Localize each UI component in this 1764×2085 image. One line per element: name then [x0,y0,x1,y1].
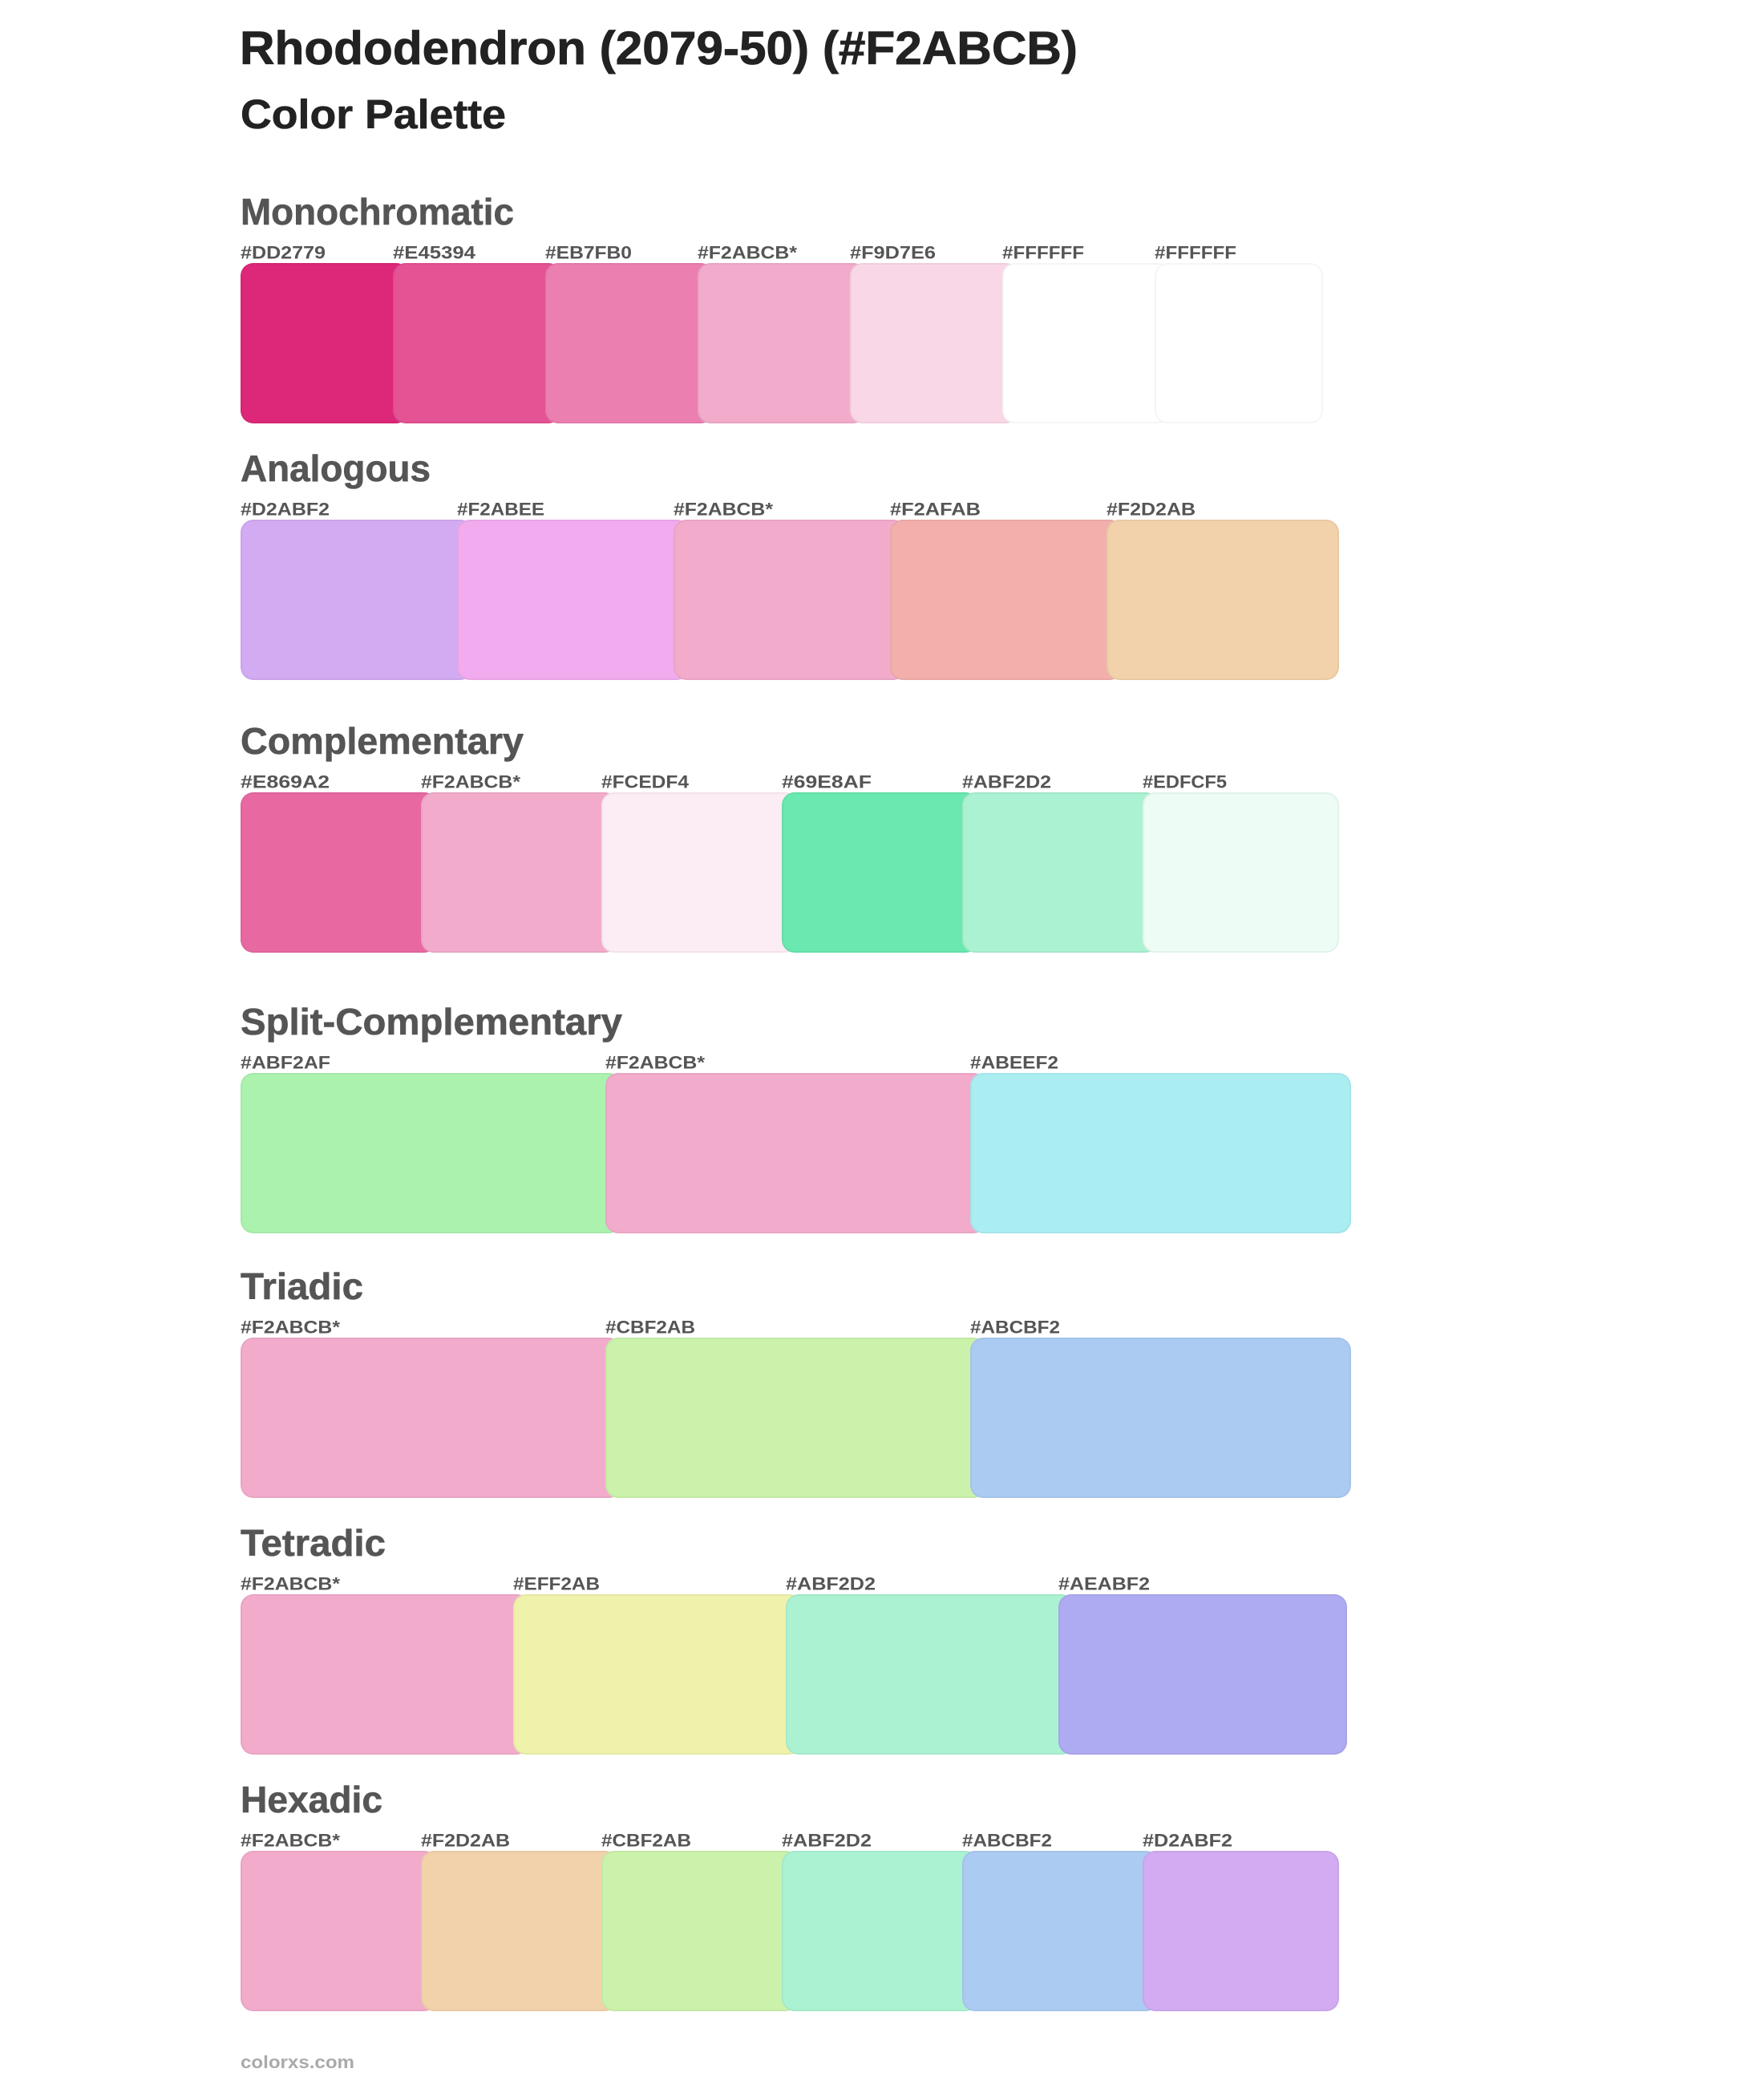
swatch: ABCBF2: #ABCBF2 [962,1830,1052,1851]
heading: Analogous: Analogous [241,447,431,489]
swatch: E869A2: #E869A2 [241,771,330,792]
subtitle: Color Palette [241,91,506,137]
swatch: FFFFFF: #FFFFFF [1155,242,1236,263]
swatch: F2ABCB [605,1052,986,1233]
swatch: F2ABCB: #F2ABCB* [674,499,773,520]
swatch: CBF2AB: #CBF2AB [605,1317,695,1338]
panel: Analogous [241,447,1339,680]
swatch: F2ABCB [674,499,906,680]
panel: Split-Complementary [241,1001,1351,1233]
swatch: F2ABCB [698,242,866,423]
panel: Complementary [241,720,1339,953]
swatch: F2ABCB [241,1317,621,1498]
footer: source: colorxs.com [241,2052,354,2072]
panel: Triadic [241,1265,1351,1498]
swatch: CBF2AB: #CBF2AB [601,1830,691,1851]
panel: Monochromatic [241,191,1323,423]
title: Rhododendron (2079-50) (#F2ABCB) [240,22,1078,75]
swatch: EB7FB0: #EB7FB0 [545,242,632,263]
swatch: ABF2D2: #ABF2D2 [782,1830,872,1851]
swatch: ABF2D2: #ABF2D2 [962,771,1051,792]
swatch: F2ABCB: #F2ABCB* [421,771,520,792]
swatch: F2AFAB [890,499,1123,680]
swatch: F2ABEE: #F2ABEE [457,499,544,520]
swatch: F2ABCB [241,1830,437,2011]
swatch: D2ABF2 [241,499,473,680]
swatch: 69E8AF [782,771,978,953]
swatch: ABCBF2 [962,1830,1159,2011]
swatch: FFFFFF [1002,242,1171,423]
swatch: F9D7E6: #F9D7E6 [850,242,936,263]
swatch: EFF2AB: #EFF2AB [513,1573,600,1594]
swatch: ABEEF2: #ABEEF2 [970,1052,1058,1073]
swatch: DD2779 [241,242,409,423]
swatch: F2ABEE [457,499,690,680]
heading: Monochromatic: Monochromatic [241,191,514,233]
swatch: E45394 [393,242,561,423]
swatch: D2ABF2: #D2ABF2 [1143,1830,1232,1851]
swatch: FCEDF4 [601,771,798,953]
swatch: EDFCF5 [1143,771,1339,953]
swatch: DD2779: #DD2779 [241,242,326,263]
panel: Tetradic [241,1522,1347,1755]
swatch: D2ABF2 [1143,1830,1339,2011]
heading: Split-Complementary: Split-Complementary [241,1001,622,1042]
swatch: F2D2AB [421,1830,617,2011]
swatch: F2ABCB [421,771,617,953]
heading: Hexadic: Hexadic [241,1779,382,1820]
swatch: ABF2D2 [782,1830,978,2011]
swatch: F2D2AB: #F2D2AB [421,1830,510,1851]
swatch: 69E8AF: #69E8AF [782,771,872,792]
swatch: ABF2D2 [962,771,1159,953]
swatch: FFFFFF [1155,242,1323,423]
swatch: ABCBF2: #ABCBF2 [970,1317,1060,1338]
heading: Triadic: Triadic [241,1265,363,1307]
swatch: F2ABCB: #F2ABCB* [241,1317,340,1338]
swatch: AEABF2 [1058,1573,1347,1755]
swatch: CBF2AB [605,1317,986,1498]
swatch: F2ABCB [241,1573,529,1755]
swatch: EDFCF5: #EDFCF5 [1143,771,1227,792]
swatch: F9D7E6 [850,242,1018,423]
swatch: E869A2 [241,771,437,953]
swatch: F2D2AB: #F2D2AB [1107,499,1196,520]
swatch: AEABF2: #AEABF2 [1058,1573,1150,1594]
heading: Tetradic: Tetradic [241,1522,386,1564]
swatch: F2D2AB [1107,499,1339,680]
swatch: F2AFAB: #F2AFAB [890,499,981,520]
swatch: ABF2AF [241,1052,621,1233]
swatch: F2ABCB: #F2ABCB* [698,242,797,263]
swatch: D2ABF2: #D2ABF2 [241,499,330,520]
swatch: ABF2AF: #ABF2AF [241,1052,330,1073]
swatch: EFF2AB [513,1573,802,1755]
swatch: ABF2D2: #ABF2D2 [786,1573,876,1594]
swatch: CBF2AB [601,1830,798,2011]
swatch: ABEEF2 [970,1052,1351,1233]
swatch: EB7FB0 [545,242,714,423]
swatch: FFFFFF: #FFFFFF [1002,242,1084,263]
swatch: E45394: #E45394 [393,242,476,263]
heading: Complementary: Complementary [241,720,524,762]
panel: Hexadic [241,1779,1339,2011]
swatch: F2ABCB: #F2ABCB* [605,1052,705,1073]
swatch: FCEDF4: #FCEDF4 [601,771,690,792]
swatch: ABF2D2 [786,1573,1074,1755]
swatch: F2ABCB: #F2ABCB* [241,1573,340,1594]
swatch: ABCBF2 [970,1317,1351,1498]
swatch: F2ABCB: #F2ABCB* [241,1830,340,1851]
